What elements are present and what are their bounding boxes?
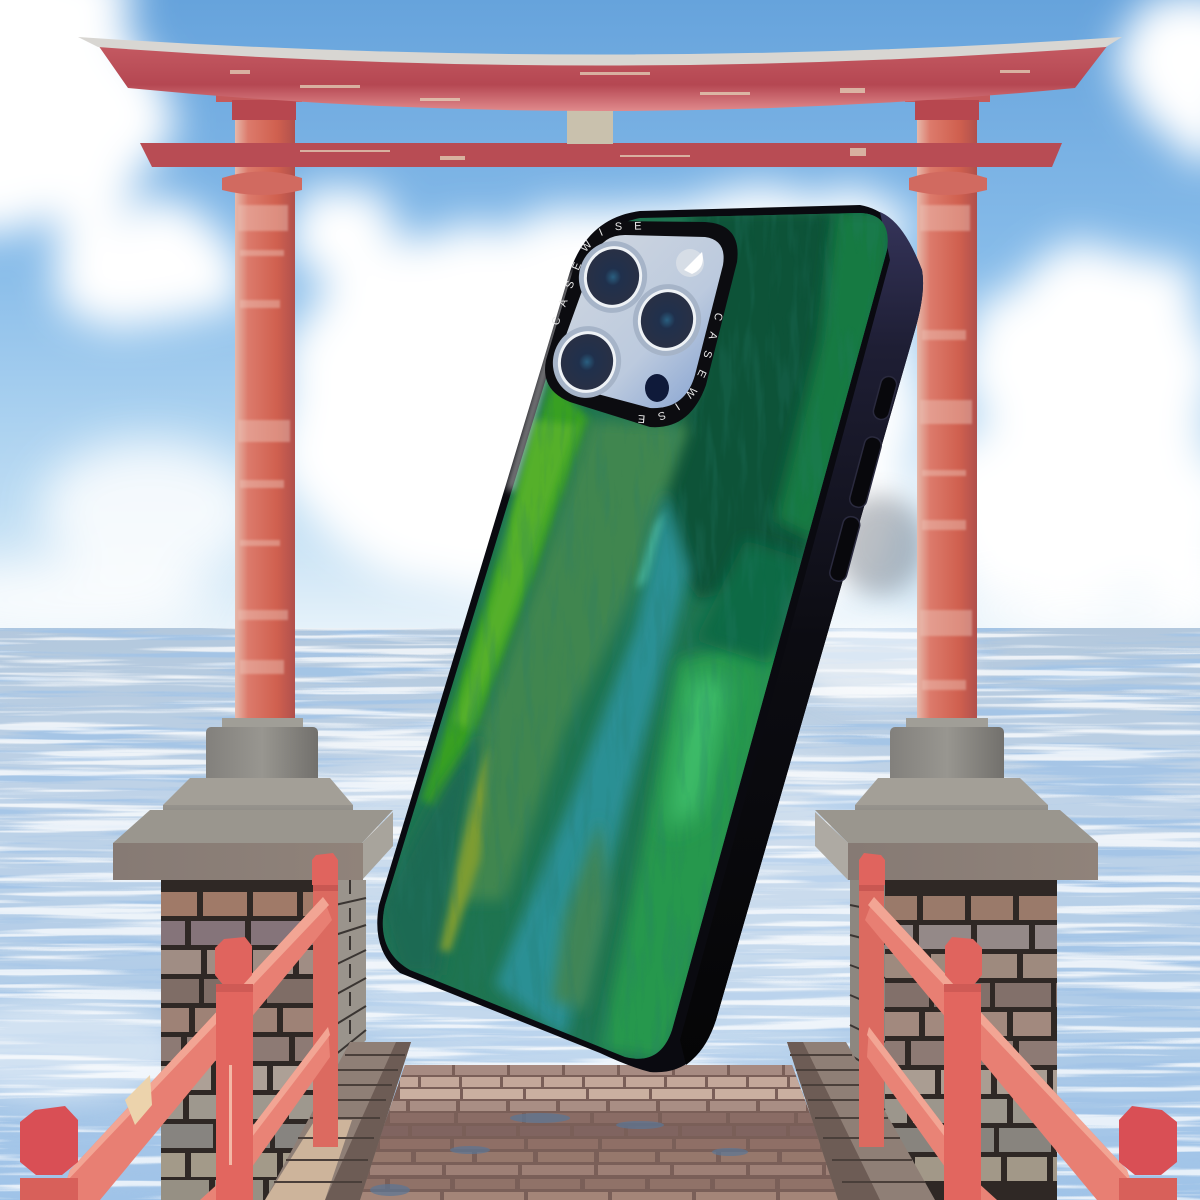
paint: teal stroke bbox=[495, 490, 690, 1040]
left pillar bbox=[216, 84, 302, 720]
paint: olive lower stroke bbox=[552, 820, 610, 1010]
paint: brush texture bbox=[438, 213, 878, 1008]
brand text: upper ring: CASEWISE bbox=[552, 222, 642, 324]
stone paved walkway bbox=[358, 1065, 850, 1200]
left stone base bbox=[113, 718, 393, 880]
middle post bbox=[215, 937, 253, 1200]
top rail bbox=[60, 897, 332, 1200]
cloud: center bbox=[275, 180, 920, 620]
torii gate bbox=[78, 37, 1122, 720]
camera plate bbox=[556, 235, 724, 408]
cloud: lower left haze bbox=[0, 440, 1200, 635]
paint: right green stripe bbox=[775, 210, 892, 540]
water bbox=[0, 615, 1200, 1200]
paint: dark lower left bbox=[378, 730, 482, 975]
top beam bbox=[98, 45, 1108, 111]
flash bbox=[676, 249, 704, 277]
lower tie beam bbox=[140, 143, 1062, 167]
top beam cap bbox=[78, 37, 1122, 66]
side wall highlight bbox=[680, 212, 923, 1065]
right pillar bbox=[905, 84, 990, 720]
paint: right bright green bbox=[600, 640, 785, 1060]
cloud: right bbox=[930, 245, 1200, 615]
camera bezel bbox=[545, 221, 738, 428]
side buttons bbox=[828, 375, 898, 583]
cloud: upper left bbox=[0, 0, 235, 325]
back post bbox=[312, 853, 338, 1147]
right walkway curb bbox=[787, 1042, 935, 1200]
lens: right bbox=[625, 276, 709, 364]
lens: bottom bbox=[545, 318, 629, 406]
right fence bbox=[859, 853, 1177, 1200]
left fence bbox=[20, 853, 338, 1200]
cloud: upper right bbox=[1115, 0, 1200, 170]
clouds bbox=[0, 0, 1200, 620]
grey shaded cloud beside phone bbox=[835, 495, 925, 595]
sky background bbox=[0, 0, 1200, 630]
left brick column bbox=[161, 880, 366, 1200]
phone case bbox=[377, 205, 924, 1072]
brand text: lower ring: CASEWISE bbox=[638, 313, 722, 424]
right middle post bbox=[944, 937, 982, 1200]
right lower rail bbox=[867, 1027, 997, 1200]
lens: top bbox=[571, 233, 655, 321]
paint: dark upper green bbox=[658, 214, 840, 602]
right top rail bbox=[865, 897, 1137, 1200]
lower rail bbox=[200, 1027, 330, 1200]
peeled paint flecks bbox=[230, 70, 1030, 160]
center strut bbox=[567, 100, 613, 144]
paint: lime strokes bbox=[422, 380, 590, 810]
lidar sensor bbox=[645, 374, 669, 402]
paint: aqua fleck bbox=[636, 510, 665, 590]
sun glare on left edge bbox=[510, 272, 574, 490]
right brick column bbox=[850, 880, 1057, 1200]
left walkway curb bbox=[265, 1042, 411, 1200]
paint: olive grey wash bbox=[445, 420, 690, 900]
right back post bbox=[859, 853, 885, 1147]
case body bbox=[377, 205, 923, 1072]
painted back panel bbox=[370, 200, 900, 1070]
paint: dark middle right bbox=[695, 540, 805, 665]
end post bbox=[20, 1106, 78, 1200]
right end post bbox=[1119, 1106, 1177, 1200]
paint: olive stripe bbox=[440, 745, 490, 952]
right stone base bbox=[815, 718, 1098, 880]
